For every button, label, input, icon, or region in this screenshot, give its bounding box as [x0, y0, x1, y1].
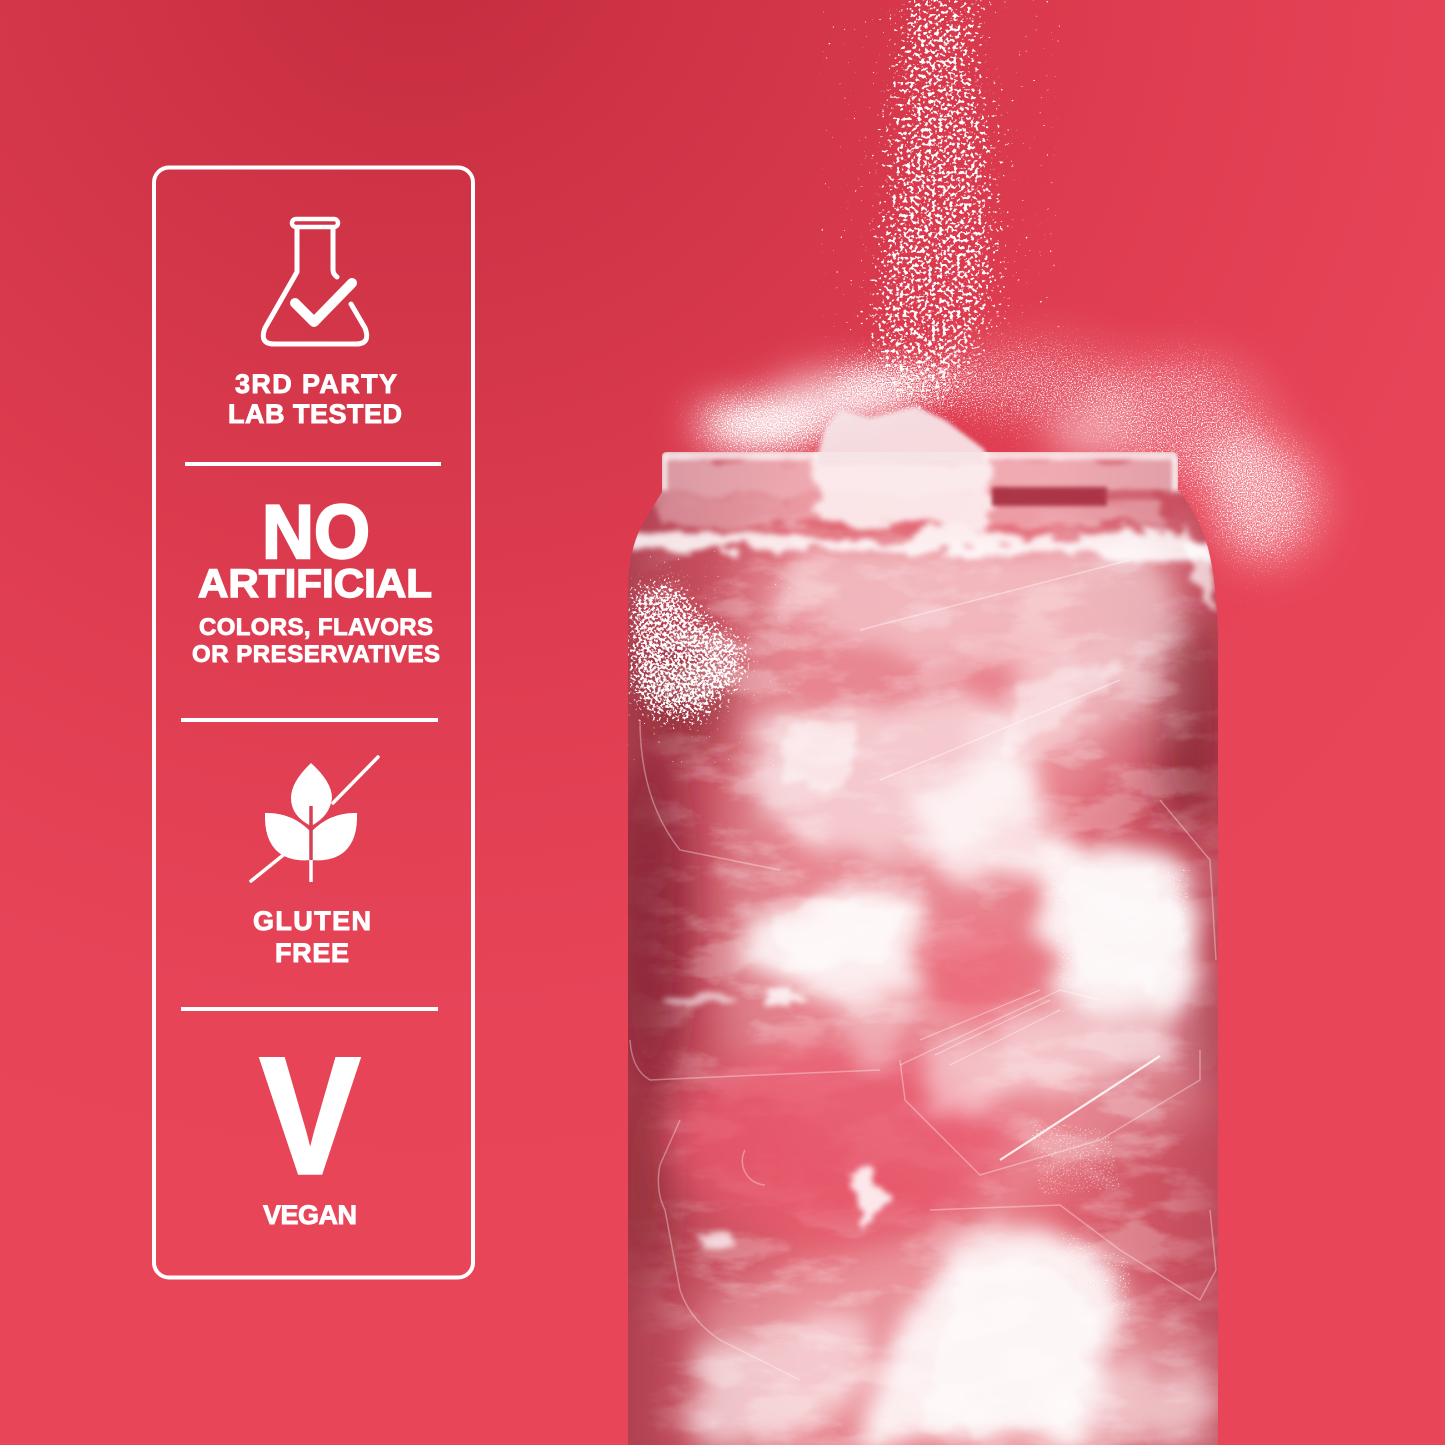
dissolved grains on left of glass: [628, 575, 752, 725]
fine powder speckle: [1030, 860, 1190, 1320]
ice cube edge highlights: [630, 560, 1216, 1380]
text: no artificial colors, flavors or preservatives: NO: [262, 490, 370, 575]
dark shading: [612, 610, 1225, 1290]
icon: crossed-out wheat leaf: [251, 757, 378, 882]
text: vegan: VEGAN: [263, 1200, 357, 1230]
speckled dust: [690, 335, 1322, 568]
mottled frost: [670, 530, 1200, 1445]
ice cube pink core: [670, 636, 1070, 1235]
icon: lab flask with check mark: [263, 219, 367, 344]
text: no artificial colors, flavors or preservatives: ARTIFICIAL: [198, 562, 432, 606]
text: 3rd party lab tested: [228, 369, 402, 429]
text: no artificial colors, flavors or preservatives: [192, 490, 440, 668]
panel: product claims: [154, 168, 473, 1278]
powder cloud above the glass rim: [690, 330, 1325, 568]
text: gluten free: [253, 906, 371, 968]
text: 3rd party lab tested: LAB TESTED: [228, 399, 402, 429]
glass filled with ice: [612, 445, 1230, 1445]
frosted white ice masses: [690, 540, 1215, 1445]
rim band: [662, 450, 1178, 506]
text: 3rd party lab tested: 3RD PARTY: [235, 369, 397, 399]
frosted pale layer: [690, 550, 1218, 1445]
rim and shoulder frost: [630, 450, 1216, 610]
icon: large V: V: [260, 1024, 360, 1209]
text: no artificial colors, flavors or preservatives: OR PRESERVATIVES: [192, 641, 440, 668]
haze: soft pink powder glow: [695, 330, 1325, 566]
powder stream falling from top: [870, 0, 1000, 400]
text: gluten free: FREE: [275, 938, 349, 968]
text: gluten free: GLUTEN: [253, 906, 371, 936]
ice chunk peak above rim: [815, 406, 985, 465]
crisp frost details: [660, 660, 1190, 1430]
text: no artificial colors, flavors or preservatives: COLORS, FLAVORS: [199, 614, 433, 641]
panel outline: [154, 168, 473, 1278]
glass body: [620, 445, 1230, 1445]
